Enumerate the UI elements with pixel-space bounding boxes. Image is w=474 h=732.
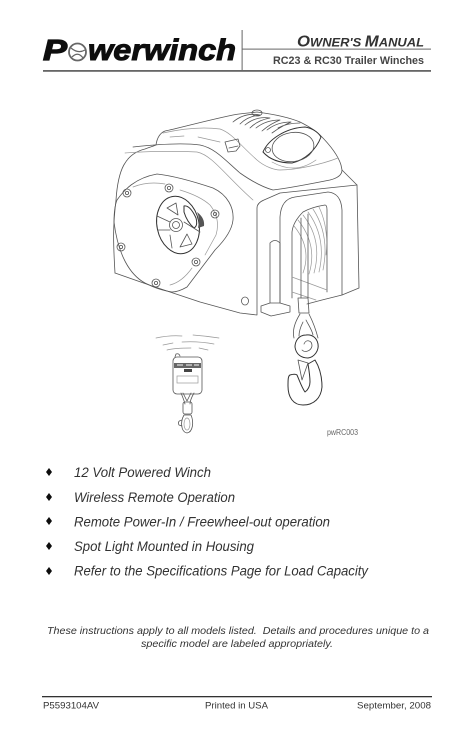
title: owner's manual: OWNER'S MANUAL: [297, 34, 424, 50]
feature 5: Refer to the Specifications Page for Load Capacity: [74, 564, 369, 578]
applicability note: specific model are labeled appropriately.: [141, 638, 333, 650]
logo: Powerwinch: P: [43, 35, 68, 67]
remote signal waves: [156, 335, 219, 350]
feature list: [46, 465, 369, 578]
fins: [233, 114, 300, 133]
footer: [42, 696, 432, 712]
post and base: [242, 240, 290, 316]
header rules: [43, 30, 431, 72]
gear plate with bolts: [114, 174, 233, 292]
remote control: [173, 354, 202, 433]
footer: Printed in USA: [205, 700, 269, 712]
feature 2: Wireless Remote Operation: [74, 490, 235, 505]
feature 1: 12 Volt Powered Winch: [74, 465, 211, 480]
figure code: pwRC003: [327, 428, 358, 437]
winch housing: [114, 110, 359, 315]
winch illustration: [114, 110, 359, 437]
spot light: [263, 127, 321, 168]
feature 3: Remote Power-In / Freewheel-out operation: [74, 514, 330, 530]
feature 4: Spot Light Mounted in Housing: [74, 539, 254, 554]
applicability note: These instructions apply to all models listed. Details and procedures unique to a: [47, 625, 429, 637]
footer: September, 2008: [357, 700, 431, 712]
latch: [225, 139, 240, 152]
applicability note: [47, 625, 429, 650]
hub: [151, 192, 205, 258]
cable window: [280, 192, 342, 303]
header: [43, 30, 431, 72]
logo: Powerwinch: werwinch: [88, 34, 236, 67]
bump: [252, 110, 262, 116]
subtitle: models: RC23 & RC30 Trailer Winches: [273, 55, 424, 67]
hook: [288, 298, 322, 405]
footer: P5593104AV: [43, 700, 100, 712]
